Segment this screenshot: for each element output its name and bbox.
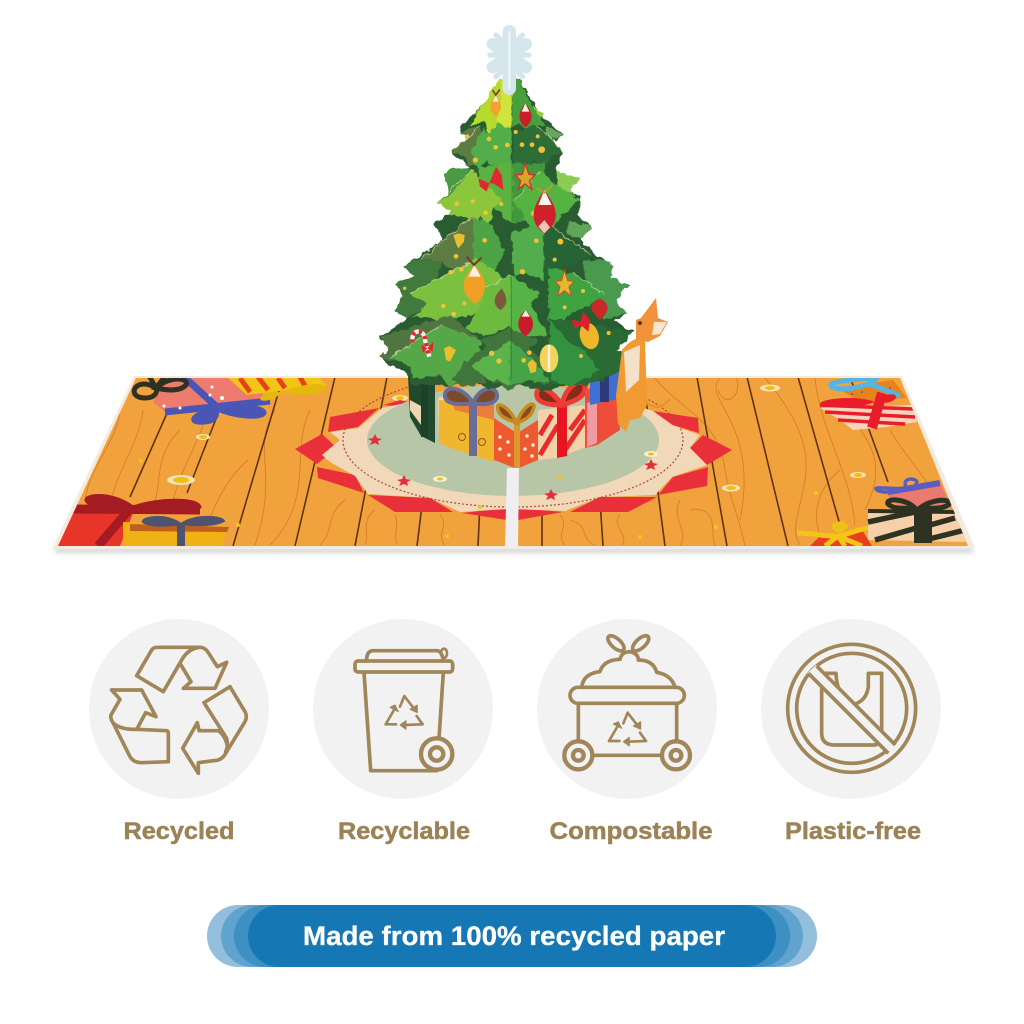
red and pink gift with blue top	[585, 368, 622, 448]
gift: bottom left group	[55, 496, 229, 546]
yellow bow ornament	[453, 233, 465, 248]
rug red points	[295, 400, 732, 520]
wood grain	[85, 375, 935, 546]
tier 2	[452, 127, 485, 167]
plank lines	[130, 377, 888, 546]
tree dark silhouette	[380, 77, 638, 392]
gift: bottom right group	[797, 479, 966, 546]
branch highlights	[390, 125, 603, 357]
red bow	[478, 167, 503, 192]
banner text: Made from 100% recycled paper	[303, 921, 726, 951]
card shadow	[54, 548, 974, 553]
badge circle	[537, 619, 717, 799]
tier 4 left	[422, 217, 477, 270]
yellow gift with purple bow	[439, 389, 497, 462]
badge: recyclable	[313, 619, 493, 845]
striped gold ornament	[540, 344, 558, 372]
tier 3 centre	[478, 163, 513, 223]
rug sage centre	[367, 384, 659, 496]
cat head	[636, 298, 668, 342]
tier 5 right	[548, 268, 603, 333]
floor light specks	[139, 384, 866, 539]
pop-up card	[50, 370, 980, 553]
label: compostable: Compostable	[550, 818, 712, 845]
red bauble centre low	[518, 310, 533, 336]
red striped gift	[537, 382, 587, 460]
rug lights	[433, 451, 658, 509]
large gold star	[515, 163, 535, 189]
rug cream centre	[322, 400, 707, 512]
tier 5 centre flap	[467, 275, 510, 337]
tree skirt rug	[295, 373, 732, 520]
badge circle	[313, 619, 493, 799]
top orange bauble	[490, 89, 501, 117]
lower right dark branch	[547, 318, 638, 385]
lower right green branch	[550, 320, 600, 387]
gold bauble with red bow	[572, 312, 602, 351]
icon: wheelie bin	[355, 649, 453, 771]
lower orange bauble	[464, 257, 485, 304]
top red bauble	[519, 103, 532, 127]
cat chest	[624, 345, 640, 392]
cat body	[616, 338, 647, 432]
gold lights	[403, 130, 611, 364]
label: plastic-free: Plastic-free	[785, 818, 921, 845]
gift boxes under tree	[408, 368, 622, 468]
lower left olive branch	[380, 315, 487, 383]
wooden floor	[50, 370, 980, 550]
tier 5 left	[410, 258, 503, 320]
label: recyclable: Recyclable	[338, 818, 470, 845]
gift: top left group	[134, 374, 327, 423]
orange gift with gold bow	[494, 404, 538, 468]
tier 1: top	[470, 78, 512, 133]
icon: no plastic bag	[788, 644, 916, 772]
tier 4 right	[512, 220, 543, 280]
cat face	[638, 321, 642, 325]
dark green striped gift	[408, 375, 447, 443]
gold bows lower	[444, 346, 456, 362]
lower centre branch	[450, 328, 550, 390]
card paper edge	[52, 376, 975, 549]
small right red bauble	[591, 298, 607, 320]
banner: made from recycled paper	[207, 905, 817, 967]
tier 3 left flap	[437, 170, 502, 230]
centre fold	[505, 468, 519, 547]
badge circle	[89, 619, 269, 799]
candy cane bow	[422, 342, 433, 353]
cat figure	[616, 298, 670, 432]
gold star right	[555, 270, 574, 296]
snowflake topper	[490, 32, 529, 88]
label: recycled: Recycled	[124, 818, 234, 845]
cat ear inner	[652, 322, 667, 335]
badge: plastic-free	[761, 619, 941, 845]
icon: recycling arrows	[111, 647, 246, 773]
gift: top right group	[820, 376, 917, 430]
eco badge row	[89, 619, 941, 845]
tree branches	[380, 77, 638, 392]
rug stars	[368, 434, 658, 500]
christmas tree	[380, 32, 638, 392]
large red bauble	[534, 185, 556, 233]
badge: compostable	[537, 619, 717, 845]
candy cane	[412, 332, 429, 357]
tier 3 right flap	[513, 170, 580, 233]
back branches	[444, 168, 470, 193]
rug stitched ring	[343, 373, 683, 507]
badge circle	[761, 619, 941, 799]
badge: recycled	[89, 619, 269, 845]
lower left green branch	[390, 325, 483, 385]
centre fold lines	[511, 80, 549, 380]
cat tail	[646, 399, 670, 407]
small bauble	[495, 288, 506, 310]
icon: compost cart	[564, 633, 690, 769]
